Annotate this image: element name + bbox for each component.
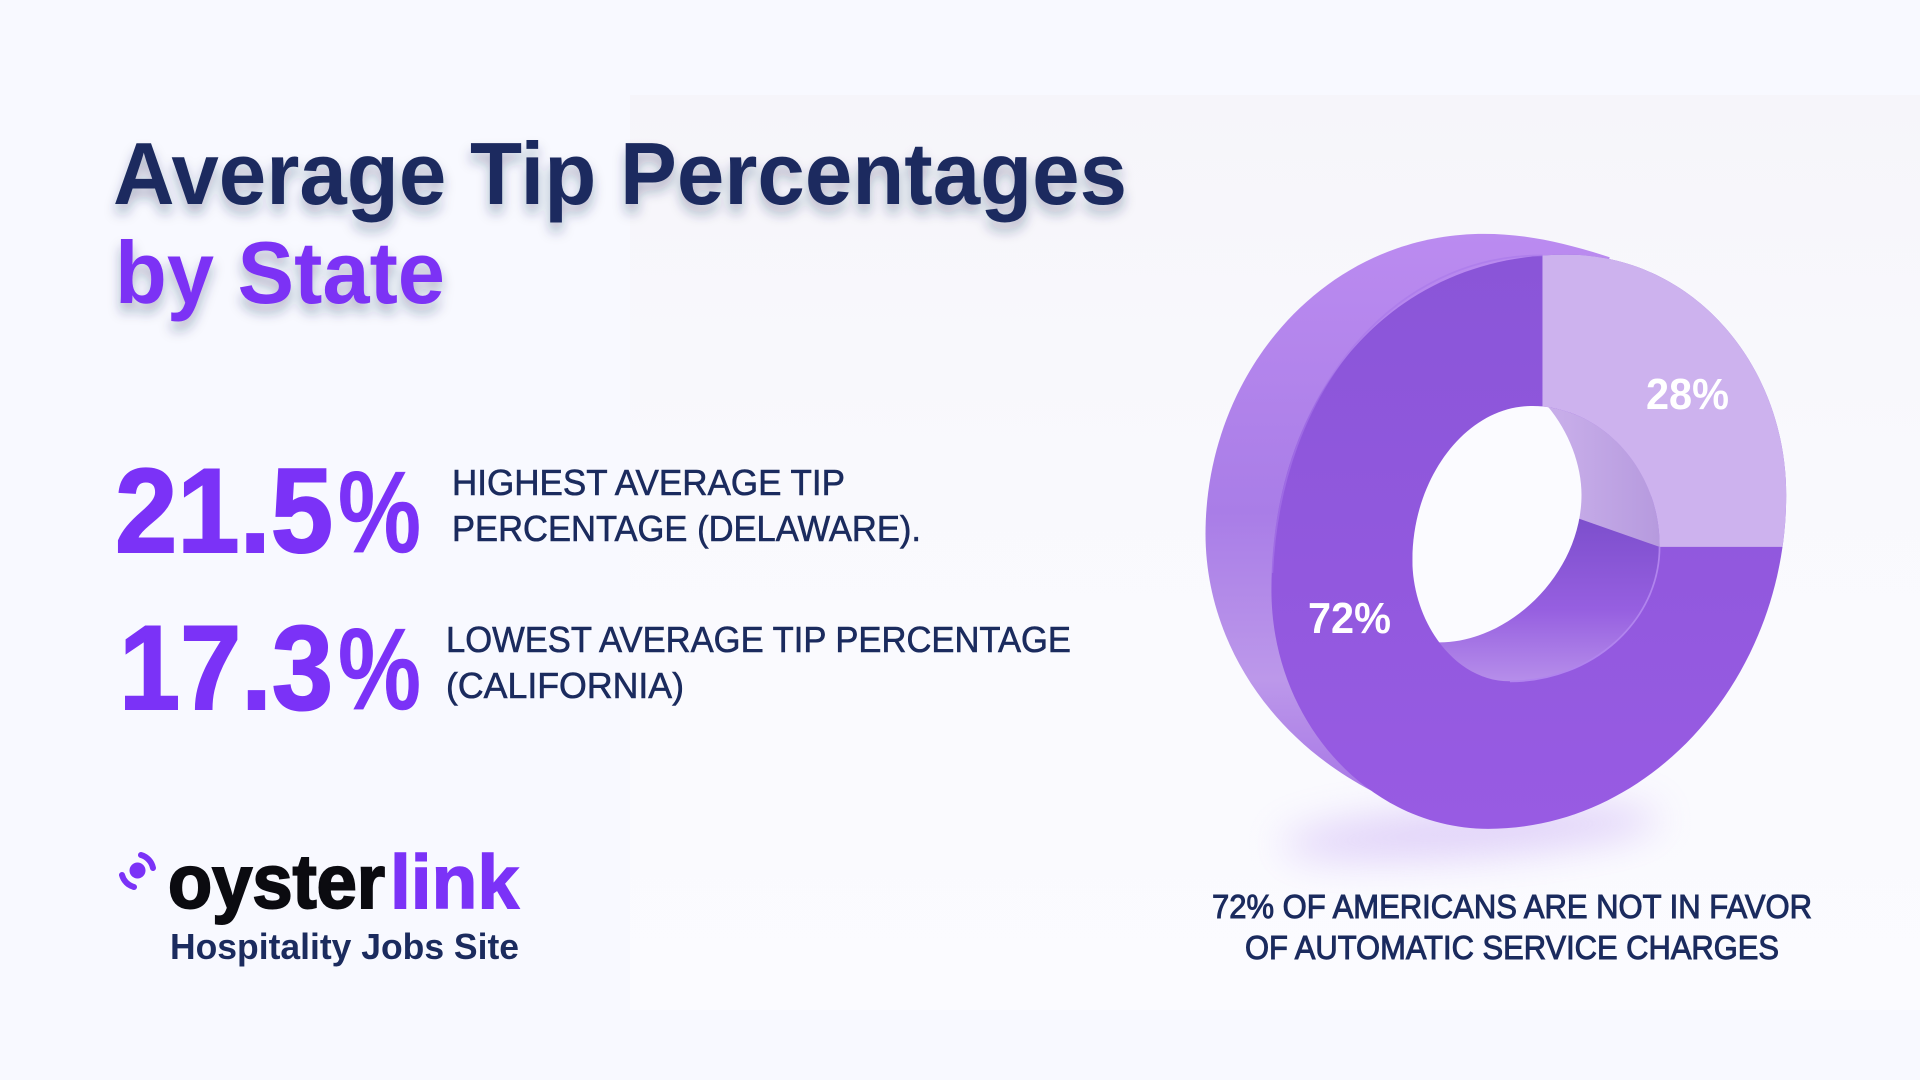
icon: oyster — [122, 855, 153, 887]
donut chart — [1206, 234, 1786, 877]
label 72%: 72% — [1308, 594, 1391, 643]
caption: OF AUTOMATIC SERVICE CHARGES — [1245, 929, 1779, 966]
stat label: lowest: LOWEST AVERAGE TIP PERCENTAGE — [446, 619, 1071, 660]
logo — [122, 840, 520, 967]
wordmark — [168, 840, 520, 925]
tagline: Hospitality Jobs Site — [170, 926, 519, 967]
stat label: lowest — [446, 619, 1071, 706]
infographic — [110, 140, 1812, 966]
stat value 21.5%: % — [338, 447, 421, 577]
stat: lowest — [119, 601, 1071, 735]
slice: 28 percent — [1536, 254, 1786, 547]
stat label: highest: HIGHEST AVERAGE TIP — [452, 462, 845, 503]
stat label: lowest: (CALIFORNIA) — [446, 665, 684, 706]
title — [113, 124, 1127, 322]
stat value 17.3%: 17.3 — [119, 601, 333, 735]
inner wall upper — [1544, 406, 1660, 547]
stat value 17.3%: % — [338, 604, 421, 734]
slice: 72 percent — [1271, 255, 1786, 829]
hole — [1412, 406, 1582, 642]
inner wall lower — [1440, 519, 1658, 682]
stat: highest — [115, 444, 921, 578]
wordmark: oyster — [168, 840, 385, 925]
caption — [1212, 888, 1812, 966]
caption: 72% OF AMERICANS ARE NOT IN FAVOR — [1212, 888, 1812, 925]
background panel — [630, 95, 1920, 1010]
stat label: highest: PERCENTAGE (DELAWARE). — [452, 508, 921, 549]
stat value 21.5%: 21.5 — [115, 444, 333, 578]
wordmark: link — [390, 840, 520, 925]
stat label: highest — [452, 462, 921, 549]
donut body — [1206, 234, 1786, 829]
drop shadow — [1279, 795, 1661, 869]
edge highlight — [1272, 256, 1542, 573]
hole edge highlight — [1510, 547, 1660, 681]
label 28%: 28% — [1646, 370, 1729, 419]
title: by State — [115, 223, 445, 322]
donut side — [1206, 234, 1610, 791]
title: Average Tip Percentages — [113, 124, 1127, 223]
